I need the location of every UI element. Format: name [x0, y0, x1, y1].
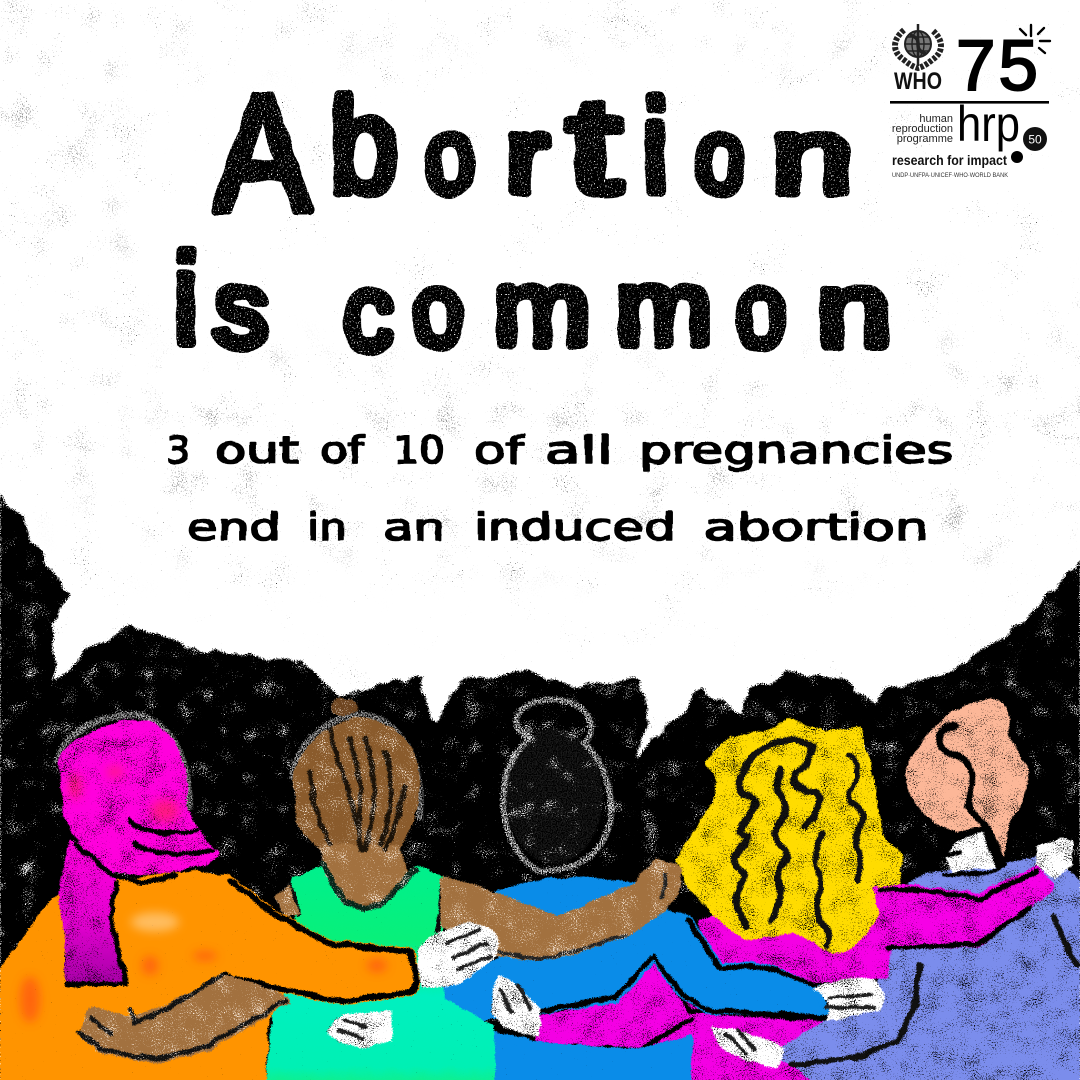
subtitle line 2: end	[187, 506, 281, 549]
subtitle line 1: out	[215, 429, 299, 472]
background: clear white zone above the crowd and behind the logo	[50, 40, 1040, 670]
icon: WHO emblem	[895, 24, 941, 68]
subtitle line 1: pregnancies	[639, 429, 953, 472]
person 2: brown head and braided hair	[293, 698, 420, 907]
logo block: WHO 75 and HRP 50	[890, 24, 1050, 179]
programme name: human	[919, 113, 953, 125]
title line 2: o	[413, 252, 463, 369]
icon: 50 badge	[1023, 127, 1047, 151]
title line 2: s	[214, 248, 268, 369]
icon: 50 badge: 50	[1028, 132, 1042, 146]
partners line: UNDP·UNFPA·UNICEF·WHO·WORLD BANK	[892, 173, 1008, 179]
head chalk texture	[507, 728, 603, 864]
title line 2: o	[736, 252, 786, 369]
subtitle	[166, 429, 953, 549]
title line 1: r	[506, 98, 548, 215]
subtitle line 1: all	[545, 429, 613, 472]
number 75: 75	[956, 27, 1038, 106]
title line 1: A	[214, 61, 310, 245]
person 1: orange jacket and arm	[0, 875, 417, 1080]
title line 1: n	[772, 98, 852, 215]
head chalk outline	[504, 699, 612, 872]
person 2: brown arm around person 1 waist	[78, 974, 285, 1059]
programme name: reproduction	[892, 123, 953, 135]
person 2: brown arm across person 3	[274, 863, 678, 959]
title line 2: n	[817, 252, 891, 369]
title line 2: i	[173, 226, 199, 372]
icon: sun rays	[1020, 25, 1050, 53]
subtitle line 2: an	[383, 506, 445, 549]
person 3: blue top with lower panel	[389, 880, 826, 1080]
hrp wordmark: hrp	[957, 96, 1020, 152]
person 2: green tank top	[269, 870, 492, 1080]
red pastel marks on the hijab	[69, 766, 179, 822]
subtitle line 1: 10	[393, 429, 445, 472]
title line 1: i	[642, 74, 668, 220]
subtitle line 1: of	[474, 429, 525, 472]
red pastel highlights on the jacket	[20, 951, 387, 1023]
people embracing, seen from behind	[0, 696, 1080, 1080]
icon: black dot	[1011, 151, 1023, 163]
title line 1: b	[330, 70, 398, 221]
title line 2: m	[616, 250, 712, 367]
title line 1: t	[567, 70, 621, 221]
programme name: programme	[897, 133, 953, 145]
chalk halos around heads	[58, 715, 421, 820]
subtitle line 2: abortion	[704, 506, 929, 549]
title line 1: o	[425, 98, 475, 215]
title: Abortion is common	[173, 61, 891, 373]
subtitle line 1: of	[320, 429, 365, 472]
title line 2: c	[343, 252, 393, 373]
person 4: curly yellow hair	[681, 724, 898, 950]
subtitle line 2: in	[307, 506, 347, 549]
person 5: periwinkle sweater, peach head and white neck	[778, 696, 1080, 1080]
chalk highlight on the jacket	[131, 912, 179, 932]
black night shape behind the people	[0, 486, 1080, 1080]
title line 2: m	[494, 250, 590, 367]
background: denser speckle bands at top, left and middle	[0, 0, 1080, 560]
WHO wordmark: WHO	[894, 68, 942, 95]
divider line	[890, 101, 1049, 104]
white hands	[327, 923, 884, 1067]
subtitle line 1: 3	[166, 429, 190, 472]
person 4: magenta arm across person 5	[820, 870, 1052, 975]
person 3: dark head outlined in white chalk	[504, 699, 612, 872]
person 1: magenta hijab and scarf	[58, 720, 219, 985]
tagline: research for impact	[892, 152, 1007, 168]
subtitle line 2: induced	[474, 506, 676, 549]
title line 1: o	[695, 98, 745, 215]
person 4: magenta shirt and lower arm	[540, 893, 888, 1080]
